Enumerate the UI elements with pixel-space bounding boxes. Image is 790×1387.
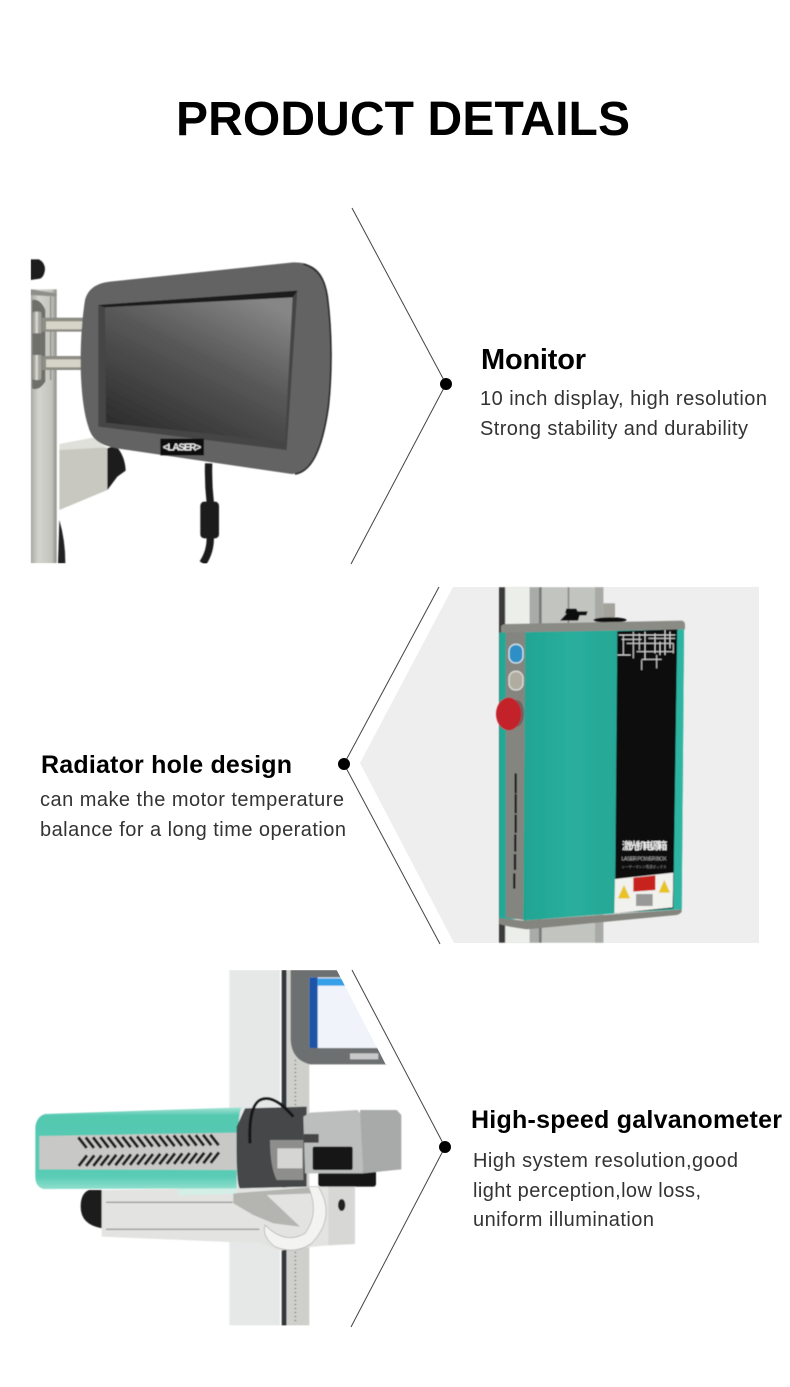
panel: radiator bbox=[40, 587, 759, 944]
text: galvanometer description: light perception,low loss, bbox=[473, 1180, 701, 1202]
text: galvanometer description bbox=[473, 1150, 738, 1231]
connector dot bbox=[338, 758, 350, 770]
photo: galvanometer head on column bbox=[35, 970, 401, 1326]
photo: laser power box bbox=[496, 587, 685, 943]
connector line bbox=[351, 208, 446, 564]
text: radiator description: can make the motor temperature bbox=[40, 789, 344, 811]
galvanometer head bbox=[303, 1110, 401, 1187]
brand badge: <LASER> bbox=[163, 442, 201, 453]
photo: monitor on arm bbox=[31, 259, 331, 563]
heading: radiator: Radiator hole design bbox=[41, 751, 292, 779]
text: galvanometer description: High system resolution,good bbox=[473, 1150, 738, 1172]
galvo bracket and cable bbox=[237, 1099, 307, 1188]
text: monitor description: Strong stability and durability bbox=[480, 418, 748, 440]
background monitor bbox=[291, 970, 389, 1064]
heading: galvanometer: High-speed galvanometer bbox=[471, 1106, 782, 1134]
connector line bbox=[344, 587, 440, 944]
text: galvanometer description: uniform illumination bbox=[473, 1209, 654, 1231]
connector dot bbox=[440, 378, 452, 390]
text: radiator description bbox=[40, 789, 346, 841]
text: monitor description: 10 inch display, high resolution bbox=[480, 388, 767, 410]
panel: galvanometer bbox=[35, 970, 782, 1327]
screen bbox=[105, 297, 293, 442]
text: monitor description bbox=[480, 388, 767, 440]
grey hexagon background bbox=[360, 587, 759, 943]
teal laser body bbox=[35, 1107, 242, 1189]
connector dot bbox=[439, 1141, 451, 1153]
heading: monitor: Monitor bbox=[481, 344, 586, 376]
brand badge bbox=[160, 439, 204, 455]
black label panel: LASER POWER BOX bbox=[621, 856, 667, 862]
connector line bbox=[351, 970, 445, 1327]
cable bbox=[200, 463, 219, 563]
black label panel: レーザーマシン電源ボックス bbox=[622, 864, 666, 869]
panel: monitor bbox=[31, 208, 767, 564]
mounting arm bbox=[81, 1187, 355, 1251]
side strip with buttons bbox=[496, 632, 525, 920]
title: PRODUCT DETAILS bbox=[176, 93, 630, 146]
text: radiator description: balance for a long time operation bbox=[40, 819, 346, 841]
black label panel: 激光机电源箱 bbox=[622, 839, 667, 852]
warning stickers bbox=[614, 873, 673, 913]
black label panel bbox=[615, 629, 677, 913]
